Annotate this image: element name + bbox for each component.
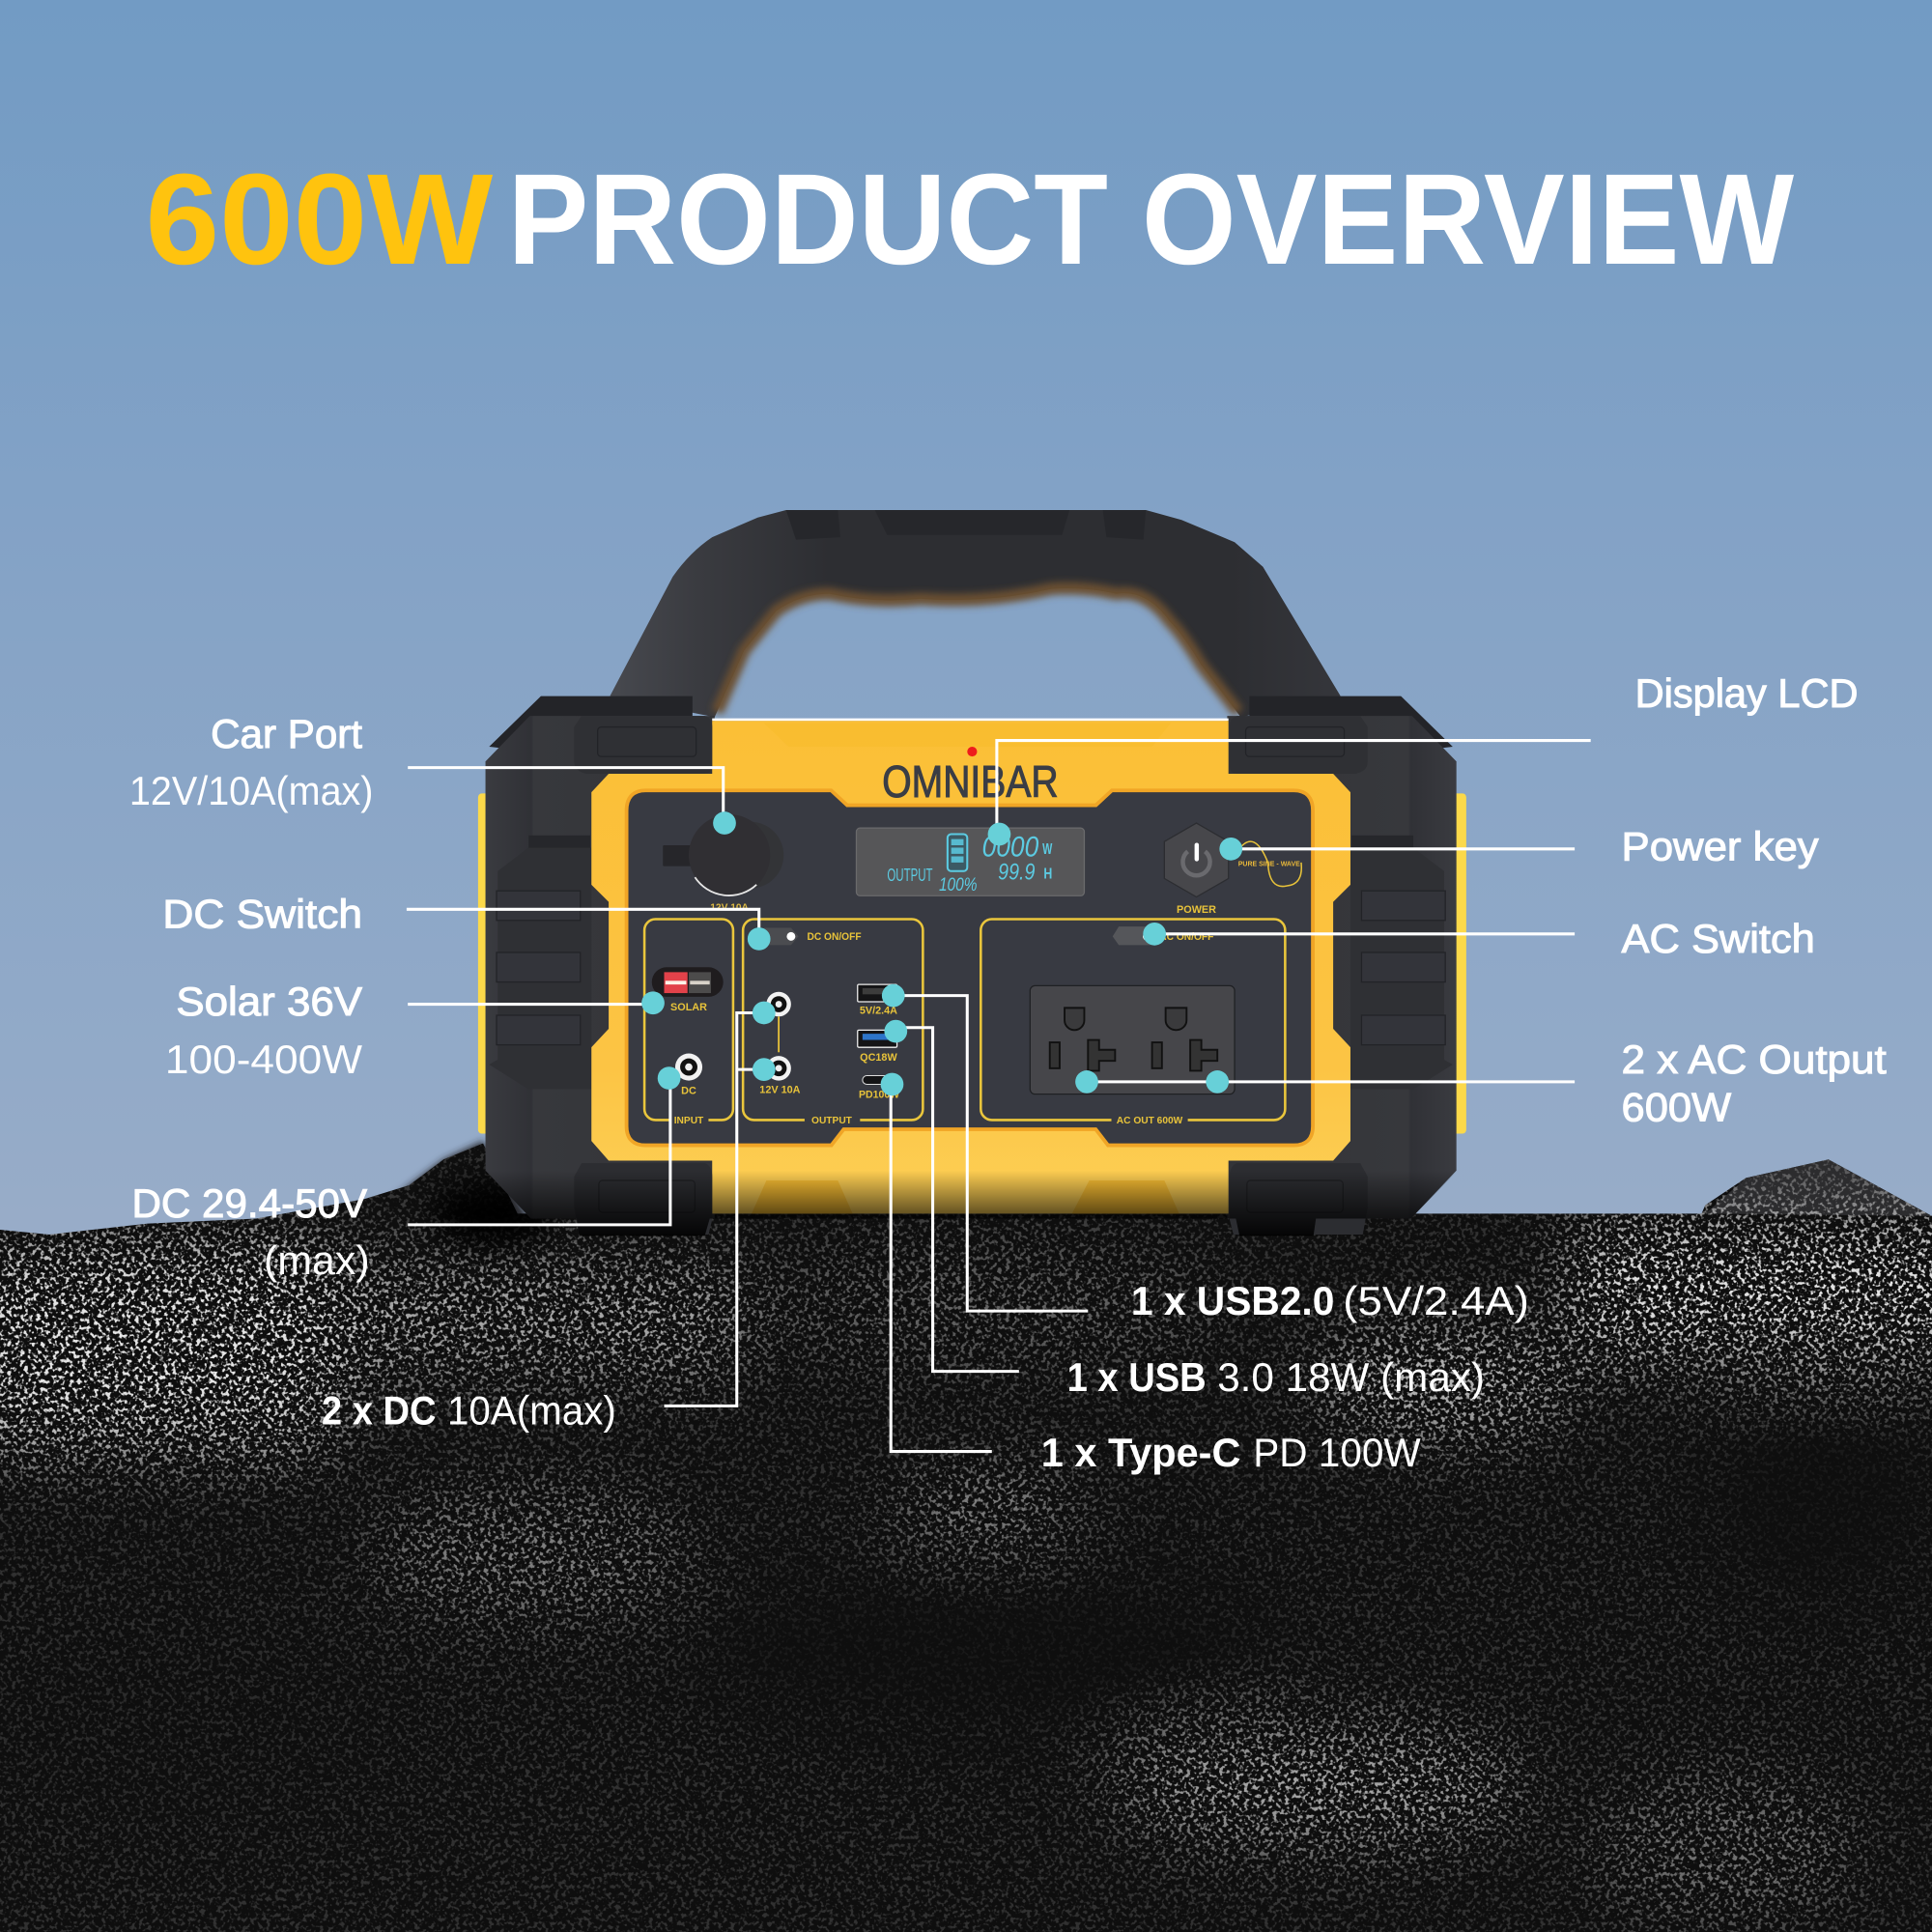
side yellow strips: [478, 793, 1466, 1133]
label: USB 2.0: (5V/2.4A): [1343, 1278, 1529, 1323]
LCD display: OUTPUT: [887, 865, 933, 885]
LCD display: 0000: [982, 831, 1039, 863]
label: solar: 100-400W: [165, 1037, 362, 1082]
label: USB 3.0: [1067, 1354, 1485, 1400]
label: USB 3.0: 3.0 18W (max): [1217, 1354, 1485, 1400]
label: 2 x DC: 10A(max): [447, 1387, 616, 1433]
yellow front frame: [591, 721, 1350, 1213]
AC switch: [1113, 926, 1214, 945]
USB 3.0 port: [858, 1030, 897, 1064]
pure sine wave mark: PURE SINE - WAVE: [1238, 862, 1300, 868]
label: DC input: (max): [264, 1237, 370, 1283]
logo: OMNIBAR: [882, 756, 1059, 807]
output box: [743, 920, 923, 1126]
label: 2 x DC: 2 x DC: [322, 1387, 437, 1433]
label: type-C: [1041, 1430, 1421, 1475]
label: DC input: [131, 1180, 370, 1283]
USB-C port: [859, 1076, 900, 1100]
label: display LCD: Display LCD: [1635, 670, 1858, 716]
USB-C port: PD100W: [859, 1089, 900, 1100]
handle: [610, 510, 1341, 717]
label: AC output: 600W: [1622, 1085, 1731, 1130]
DC outputs: [759, 992, 801, 1095]
LCD display: H: [1043, 866, 1052, 882]
solar connector: [652, 967, 724, 1013]
power key: [1164, 823, 1229, 916]
AC box: [980, 920, 1285, 1126]
label: car port: Car Port: [211, 711, 362, 756]
LCD display: W: [1042, 841, 1053, 858]
input box: INPUT: [674, 1116, 704, 1126]
label: solar: Solar 36V: [176, 979, 362, 1024]
label: solar: [165, 979, 362, 1082]
DC outputs: 12V 10A: [759, 1084, 801, 1095]
DC switch: [756, 927, 862, 945]
title: PRODUCT OVERVIEW: [508, 148, 1795, 292]
AC outlets: [1030, 985, 1235, 1094]
USB 3.0 port: QC18W: [860, 1052, 897, 1064]
car port: 12V 10A: [710, 903, 750, 914]
LCD display: 100%: [939, 874, 977, 895]
label: DC switch: DC Switch: [162, 891, 362, 936]
label: AC output: 2 x AC Output: [1622, 1037, 1887, 1082]
label: type-C: 1 x Type-C: [1041, 1430, 1240, 1475]
callout lines: [407, 741, 1591, 1452]
LCD display: 99.9: [998, 860, 1035, 886]
left side shell: [486, 696, 715, 1218]
power key: POWER: [1177, 904, 1216, 916]
DC input jack: DC: [681, 1086, 696, 1097]
label: USB 2.0: [1131, 1278, 1529, 1323]
control panel: [486, 747, 1458, 1236]
AC switch: AC ON/OFF: [1159, 931, 1214, 943]
label: USB 3.0: 1 x USB: [1067, 1354, 1207, 1400]
car port: [663, 814, 783, 914]
label: car port: 12V/10A(max): [129, 768, 373, 813]
label: type-C: PD 100W: [1253, 1430, 1421, 1475]
right side shell: [1227, 696, 1457, 1218]
USB 2.0 port: 5V/2.4A: [860, 1006, 897, 1017]
label: AC output: [1622, 1037, 1887, 1130]
blurred mound behind the device: [365, 1141, 529, 1220]
base shadow: [486, 1171, 1458, 1236]
corner blocks right: [1230, 716, 1368, 1235]
label: AC switch: AC Switch: [1622, 916, 1815, 961]
label: DC input: DC 29.4-50V: [131, 1180, 367, 1226]
label: power key: Power key: [1622, 823, 1819, 868]
DC switch: DC ON/OFF: [807, 931, 862, 943]
rocky ground: [0, 1133, 1932, 1932]
input box: [644, 920, 733, 1126]
output box: OUTPUT: [811, 1116, 853, 1126]
callout dots: [641, 811, 1242, 1095]
pure sine wave mark: [1238, 841, 1301, 887]
AC box: AC OUT 600W: [1117, 1116, 1183, 1126]
label: car port: [129, 711, 373, 813]
solar connector: SOLAR: [670, 1002, 707, 1013]
USB 2.0 port: [858, 984, 897, 1017]
title: 600W: [146, 148, 494, 292]
DC input jack: [675, 1054, 702, 1097]
corner blocks left: [574, 716, 712, 1235]
portable power station: [129, 510, 1887, 1475]
LCD display: [856, 828, 1084, 895]
label: USB 2.0: 1 x USB2.0: [1131, 1278, 1334, 1323]
label: 2 x DC: [322, 1387, 616, 1433]
